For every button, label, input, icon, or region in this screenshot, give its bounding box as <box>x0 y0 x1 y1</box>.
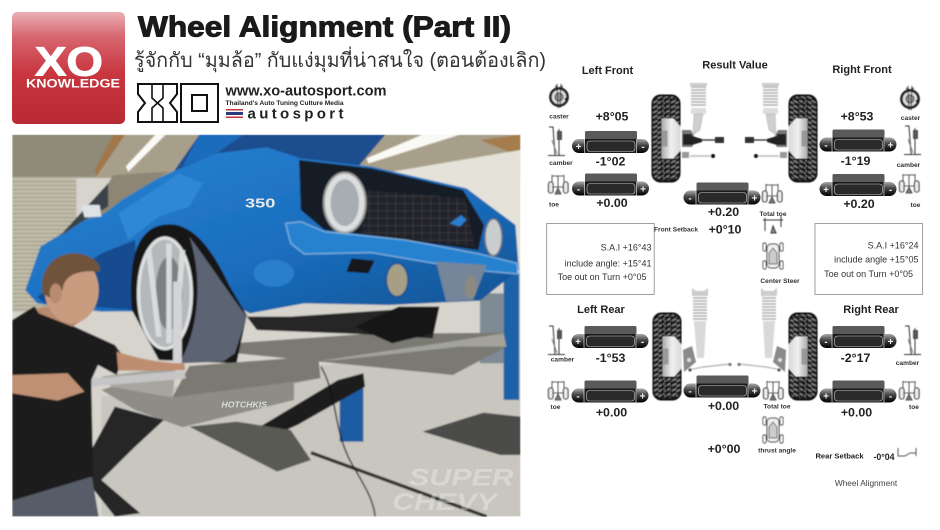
heading: Right Rear: Right Rear <box>843 304 900 316</box>
panel: header <box>12 12 546 124</box>
gauge: right rear camber <box>820 326 896 349</box>
gauge: left rear camber: - <box>641 337 644 348</box>
label: toe rear right: toe <box>909 404 919 411</box>
icons: small alignment diagrams <box>548 84 921 456</box>
watermark: SUPER <box>409 464 514 491</box>
gauges <box>572 130 896 404</box>
rear total toe value: +0.00 <box>708 399 739 413</box>
label: rear setback: Rear Setback <box>815 452 864 460</box>
gauge: left front toe: - <box>577 184 580 196</box>
values <box>596 110 875 456</box>
gauge: left front caster: - <box>641 142 645 153</box>
lift brand text: HOTCHKIS <box>221 399 267 409</box>
panel: wheel alignment results <box>547 60 922 488</box>
gauge: right front toe: + <box>823 185 829 196</box>
right front caster value: +8°53 <box>841 110 874 124</box>
gauge: right front caster: + <box>888 140 894 152</box>
label: thrust angle: thrust angle <box>758 448 796 454</box>
rear setback value: -0°04 <box>873 452 895 462</box>
gauge: left front toe <box>572 174 649 196</box>
gauge: left front caster: + <box>576 142 582 153</box>
left front camber value: -1°02 <box>596 154 625 168</box>
autosport wordmark: autosport <box>248 106 344 122</box>
left front toe value: +0.00 <box>596 196 628 210</box>
box: right SAI readings: include angle +15°05 <box>834 254 918 264</box>
gauge: right rear camber: + <box>888 337 894 348</box>
front setback value: +0°10 <box>709 222 742 236</box>
watermark: CHEVY <box>392 489 499 516</box>
label: total toe rear: Total toe <box>764 404 791 410</box>
gauge: front total toe <box>684 182 760 206</box>
label: toe left: toe <box>549 202 559 208</box>
right rear toe value: +0.00 <box>841 406 872 420</box>
gauge: right front toe <box>820 174 896 197</box>
left front caster value: +8°05 <box>596 110 629 124</box>
label: toe rear left: toe <box>551 404 561 411</box>
left rear camber value: -1°53 <box>596 351 625 365</box>
gauge: left front caster <box>572 131 649 154</box>
gauge: left rear camber: + <box>575 337 581 348</box>
watermark <box>394 468 514 510</box>
caption: Wheel Alignment <box>835 478 898 488</box>
icon: XO Knowledge badge <box>12 12 125 124</box>
icon: XO Knowledge badge: XO <box>35 38 103 84</box>
gauge: front total toe: - <box>688 194 692 204</box>
gauge: rear total toe: + <box>752 386 758 398</box>
box: right SAI readings: S.A.I +16°24 <box>868 240 918 250</box>
label: caster right: caster <box>901 115 921 122</box>
gauge: left rear camber <box>572 326 648 349</box>
label: camber rear left: camber <box>551 356 575 364</box>
front total toe value: +0.20 <box>708 205 739 219</box>
label: camber left: camber <box>549 160 573 167</box>
gauge: rear total toe <box>684 376 760 398</box>
label: caster left: caster <box>549 114 569 120</box>
photo: car on alignment lift <box>12 135 521 517</box>
gauge: right rear toe <box>820 380 896 404</box>
gauge: right rear camber: - <box>824 337 828 348</box>
gauge: rear total toe: - <box>688 386 692 398</box>
gauge: right front caster: - <box>824 140 828 152</box>
thrust angle value: +0°00 <box>708 442 741 456</box>
box: left SAI readings <box>547 224 654 294</box>
heading: Result Value: Result Value <box>702 60 768 72</box>
label: toe right: toe <box>911 202 921 209</box>
gauge: left rear toe: + <box>640 392 646 402</box>
label: camber right: camber <box>897 162 921 169</box>
box: right SAI readings <box>815 224 922 294</box>
badge text on car: 350 <box>245 195 275 210</box>
gauge: left front toe: + <box>640 184 646 196</box>
label: total toe front: Total toe <box>760 211 787 218</box>
heading: Left Front: Left Front <box>582 65 633 77</box>
right front toe value: +0.20 <box>843 197 875 211</box>
label: camber rear right: camber <box>896 360 920 367</box>
website url: www.xo-autosport.com <box>225 82 386 100</box>
gauge: right rear toe: - <box>889 392 892 402</box>
gauge: left rear toe: - <box>576 392 580 402</box>
icon: XO Knowledge badge: KNOWLEDGE <box>26 78 120 90</box>
label: center steer: Center Steer <box>760 278 800 285</box>
labels <box>549 114 921 488</box>
heading: Left Rear: Left Rear <box>577 304 626 316</box>
left rear toe value: +0.00 <box>596 406 627 420</box>
icon: XO logo mark <box>138 84 218 122</box>
box: right SAI readings: Toe out on Turn +0°05 <box>824 269 913 279</box>
box: left SAI readings: S.A.I +16°43 <box>601 242 652 252</box>
gauge: front total toe: + <box>752 194 758 204</box>
gauge: right front caster <box>820 130 896 152</box>
box: left SAI readings: include angle: +15°41 <box>565 258 652 268</box>
box: left SAI readings: Toe out on Turn +0°05 <box>558 272 646 282</box>
heading: Right Front: Right Front <box>832 64 892 76</box>
right front camber value: -1°19 <box>841 154 870 168</box>
tagline: Thailand's Auto Tuning Culture Media <box>226 100 344 107</box>
right rear camber value: -2°17 <box>841 351 870 365</box>
icon: Thai flag <box>226 109 243 118</box>
illustration: rear suspension and wheels <box>652 288 818 400</box>
title: Wheel Alignment (Part II) <box>138 12 511 44</box>
label: front setback: Front Setback <box>654 226 698 234</box>
subtitle: รู้จักกับ “มุมล้อ” กับแง่มุมที่น่าสนใจ (ตอนต้องเลิก) <box>134 46 546 73</box>
gauge: right rear toe: + <box>823 392 829 402</box>
gauge: left rear toe <box>572 380 648 404</box>
illustration: front suspension and wheels <box>652 83 818 182</box>
gauge: right front toe: - <box>889 185 892 196</box>
